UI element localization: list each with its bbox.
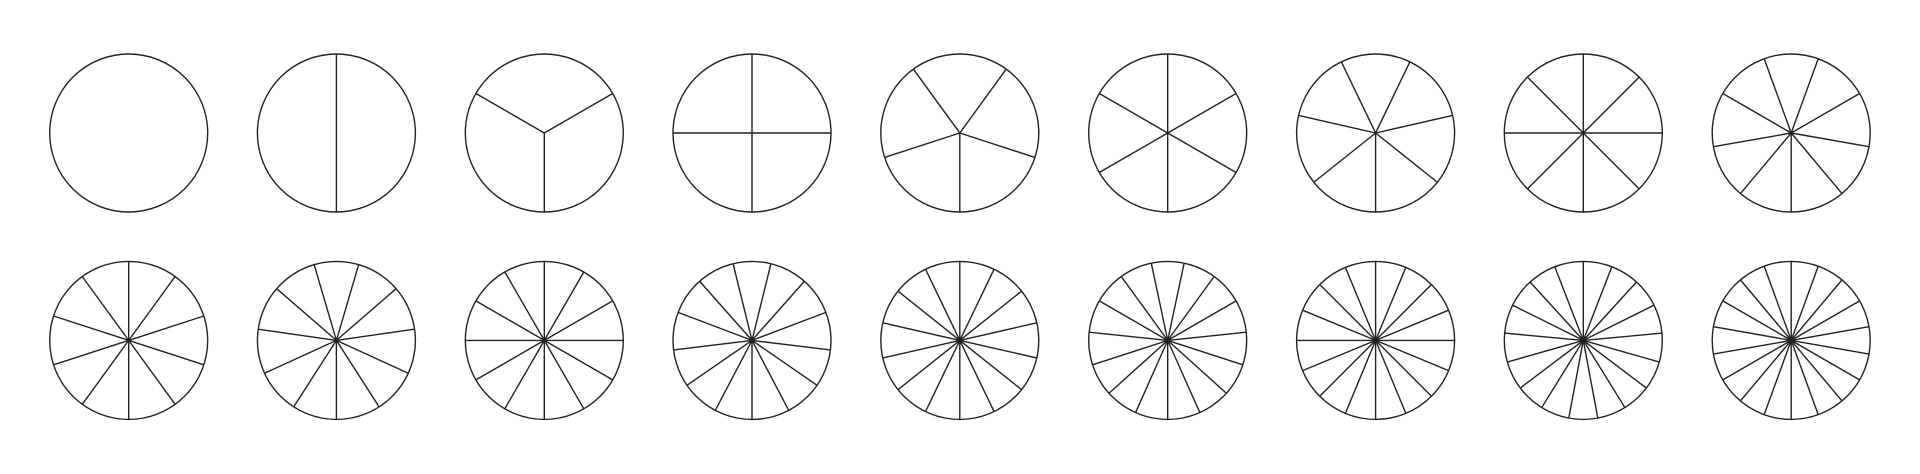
circle: 8 segments xyxy=(1504,54,1662,212)
circle: 13 segments xyxy=(673,261,831,419)
circle: 10 segments xyxy=(50,261,208,419)
circle: 11 segments xyxy=(257,261,415,419)
circle: 4 segments xyxy=(673,54,831,212)
circle: 15 segments xyxy=(1089,261,1247,419)
circle: 16 segments xyxy=(1297,261,1455,419)
circle: 9 segments xyxy=(1712,54,1870,212)
circle: 1 segment xyxy=(50,54,208,212)
circle: 18 segments xyxy=(1712,261,1870,419)
circle: 12 segments xyxy=(465,261,623,419)
circle: 7 segments xyxy=(1297,54,1455,212)
circle: 17 segments xyxy=(1504,261,1662,419)
circle: 2 segments xyxy=(257,54,415,212)
circle: 14 segments xyxy=(881,261,1039,419)
circle: 6 segments xyxy=(1089,54,1247,212)
circle: 3 segments xyxy=(465,54,623,212)
circle: 5 segments xyxy=(881,54,1039,212)
